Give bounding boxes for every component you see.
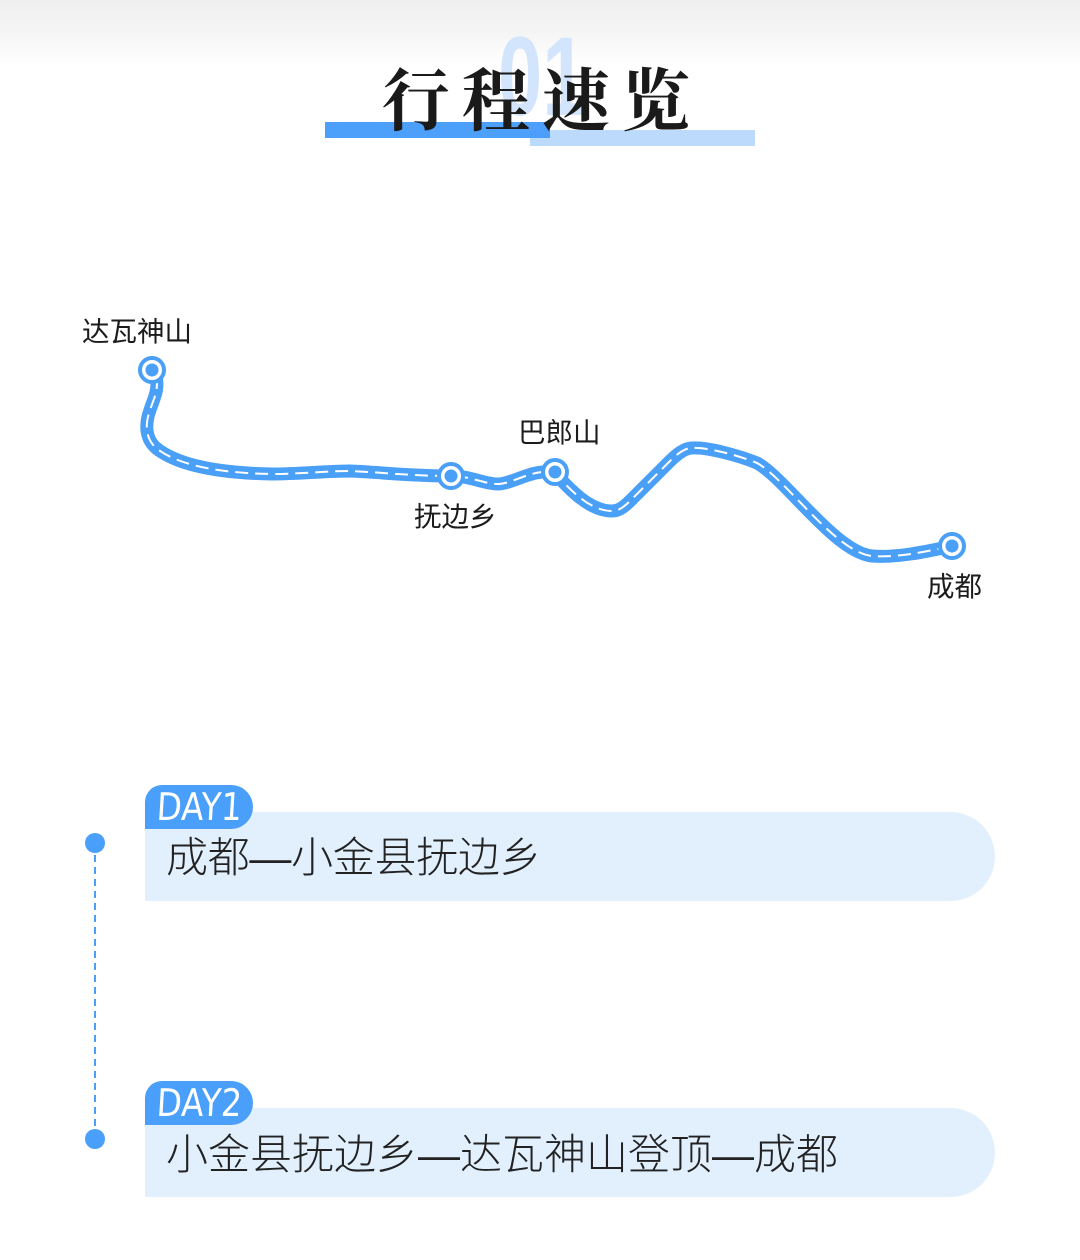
label: 抚边乡: 抚边乡 [414,501,496,532]
route map [138,356,966,563]
stop marker: 达瓦神山 [140,358,164,382]
title underline: light bar [530,130,755,146]
badge text: DAY1 [155,785,243,829]
day 1 route text: 成都—小金县抚边乡 [166,834,541,881]
section number 01: 01 [498,14,586,139]
badge: DAY2 [145,1081,253,1125]
stop marker: 抚边乡 [439,464,463,488]
title: 行程速览 [382,64,702,140]
label: 成都: 成都 [927,571,982,602]
title underline: dark bar [325,122,550,138]
header background fade [0,0,1080,66]
route line [147,376,952,556]
label: 达瓦神山: 达瓦神山 [82,316,192,347]
badge: DAY1 [145,785,253,829]
day 2 route text: 小金县抚边乡—达瓦神山登顶—成都 [166,1131,838,1178]
badge text: DAY2 [155,1081,243,1125]
panel: day 2 [145,1108,995,1197]
panel: day 1 [145,812,995,901]
label: 巴郎山: 巴郎山 [518,417,600,448]
stop marker: 成都 [940,534,964,558]
stop marker: 巴郎山 [543,460,567,484]
timeline connector [85,833,105,1149]
